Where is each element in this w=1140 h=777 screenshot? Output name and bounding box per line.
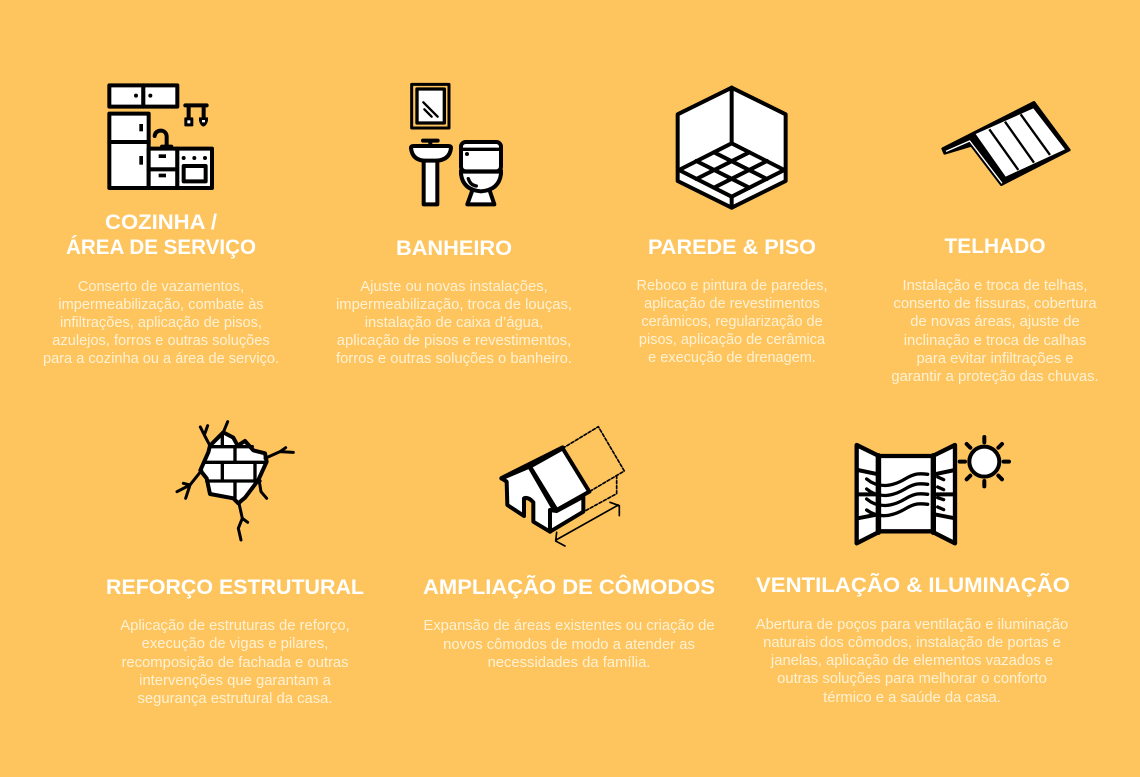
text block: garantir a proteção das chuvas.: [891, 369, 1099, 385]
heading: REFORÇO ESTRUTURAL: [106, 576, 364, 599]
panel: telhado: [891, 102, 1099, 385]
icon: house extension: [502, 427, 624, 546]
text block: Conserto de vazamentos,: [78, 279, 244, 295]
text block: inclinação e troca de calhas: [904, 333, 1086, 349]
icon: cracked brick wall: [177, 422, 293, 540]
text block: para evitar infiltrações e: [916, 351, 1074, 367]
text block: cerâmicos, regularização de: [641, 314, 823, 330]
text block: recomposição de fachada e outras: [121, 655, 349, 671]
text block: Ajuste ou novas instalações,: [360, 279, 548, 295]
text block: de novas áreas, ajuste de: [910, 314, 1080, 330]
icon: bathroom: [411, 84, 501, 204]
text block: e execução de drenagem.: [648, 350, 816, 366]
text block: conserto de fissuras, cobertura: [893, 296, 1097, 312]
icon: wall and floor: [678, 88, 786, 208]
icon: window with sun: [857, 437, 1009, 543]
heading: PAREDE & PISO: [648, 236, 816, 259]
text block: janelas, aplicação de elementos vazados e: [770, 653, 1053, 669]
text block: impermeabilização, troca de louças,: [336, 297, 572, 313]
text block: naturais dos cômodos, instalação de portas e: [763, 635, 1061, 651]
text block: segurança estrutural da casa.: [138, 691, 332, 707]
text block: Aplicação de estruturas de reforço,: [120, 618, 350, 634]
text block: Reboco e pintura de paredes,: [636, 278, 828, 294]
text block: Abertura de poços para ventilação e iluminação: [756, 617, 1068, 633]
text block: aplicação de pisos e revestimentos,: [337, 333, 571, 349]
panel: ventilação & iluminação: [756, 437, 1070, 706]
panel: ampliação de cômodos: [423, 427, 715, 671]
text block: outras soluções para melhorar o conforto: [777, 671, 1047, 687]
text block: infiltrações, aplicação de pisos,: [60, 315, 262, 331]
panel: reforço estrutural: [106, 422, 364, 707]
icon: kitchen: [109, 85, 212, 188]
icon: roof: [943, 102, 1069, 185]
text block: necessidades da família.: [488, 655, 650, 671]
text block: pisos, aplicação de cerâmica: [639, 332, 826, 348]
text block: execução de vigas e pilares,: [142, 636, 328, 652]
text block: intervenções que garantam a: [139, 673, 332, 689]
text block: para a cozinha ou a área de serviço.: [43, 351, 279, 367]
text block: instalação de caixa d’água,: [365, 315, 543, 331]
text block: Instalação e troca de telhas,: [902, 278, 1088, 294]
text block: novos cômodos de modo a atender as: [443, 637, 695, 653]
panel: banheiro: [336, 84, 572, 367]
panel: cozinha / área de serviço: [43, 85, 279, 367]
text block: forros e outras soluções o banheiro.: [336, 351, 572, 367]
text block: azulejos, forros e outras soluções: [52, 333, 270, 349]
text block: impermeabilização, combate às: [58, 297, 264, 313]
heading: AMPLIAÇÃO DE CÔMODOS: [423, 575, 715, 599]
heading: COZINHA /: [105, 211, 217, 234]
heading: BANHEIRO: [396, 237, 512, 260]
heading: TELHADO: [944, 235, 1046, 258]
text block: térmico e a saúde da casa.: [823, 690, 1001, 706]
text block: Expansão de áreas existentes ou criação de: [423, 618, 715, 634]
panel: parede & piso: [636, 88, 828, 366]
heading: VENTILAÇÃO & ILUMINAÇÃO: [756, 574, 1070, 597]
text block: aplicação de revestimentos: [644, 296, 820, 312]
heading: ÁREA DE SERVIÇO: [66, 236, 256, 259]
